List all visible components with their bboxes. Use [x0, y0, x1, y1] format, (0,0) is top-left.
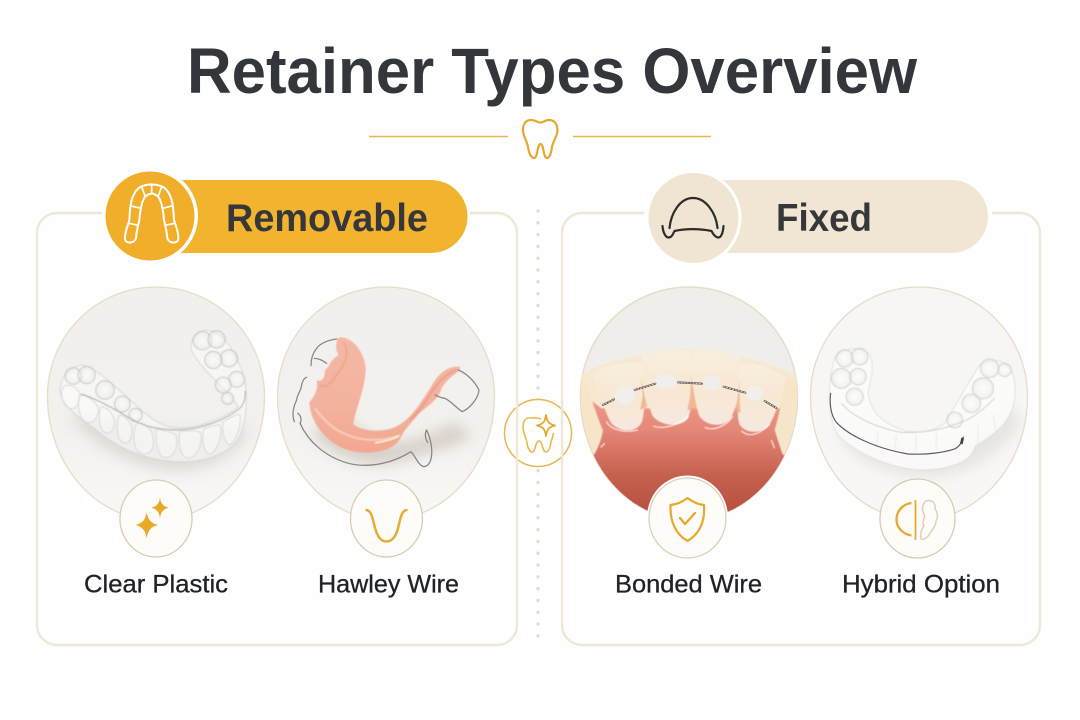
header: fixed pill: Fixed	[776, 197, 872, 240]
icon: half wire half aligner	[880, 479, 955, 558]
label: bonded wire: Bonded Wire	[615, 570, 762, 598]
panel: removable	[37, 168, 517, 645]
center dotted divider	[536, 211, 540, 645]
card: hawley wire	[278, 287, 494, 598]
image: hawley retainer	[278, 287, 494, 520]
image: clear plastic aligner	[48, 287, 264, 520]
center tooth sparkle badge	[504, 400, 572, 466]
icon: sparkles	[120, 480, 192, 557]
label: clear plastic: Clear Plastic	[84, 570, 228, 598]
header: removable pill: Removable	[226, 197, 428, 240]
title: Retainer Types Overview	[187, 35, 917, 107]
icon: shield with check	[647, 476, 728, 560]
icon: u-shaped wire	[350, 480, 422, 557]
label: hybrid option: Hybrid Option	[842, 570, 1000, 598]
title divider with tooth icon	[369, 120, 711, 158]
header: fixed pill	[646, 170, 988, 266]
card: bonded wire	[578, 287, 805, 598]
image: hybrid aligner with wire	[810, 287, 1028, 520]
image: bonded wire on teeth	[578, 287, 805, 527]
card: clear plastic	[48, 287, 264, 598]
label: hawley wire: Hawley Wire	[318, 570, 459, 598]
panel: fixed	[562, 170, 1040, 645]
header: removable pill	[102, 168, 468, 264]
card: hybrid option	[810, 287, 1028, 598]
